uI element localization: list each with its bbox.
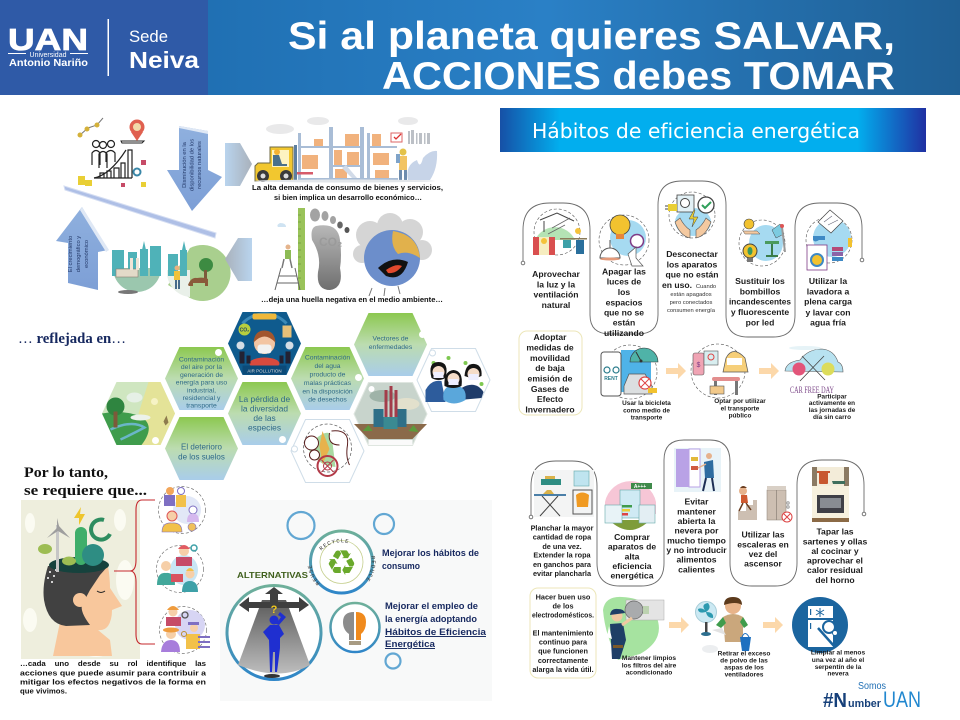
icon: bicycle rent xyxy=(601,345,658,399)
habit: tapar sartenes: aprovechar el xyxy=(807,556,863,566)
brand: somos number uan: Somos xyxy=(858,681,886,692)
title: Si al planeta quieres SALVAR, xyxy=(288,15,895,58)
habit: desconectar: en uso. xyxy=(662,280,692,290)
habit: bombillos: bombillos xyxy=(740,286,781,296)
box: electrodomésticos: que funcionen xyxy=(538,647,588,656)
illustration: carbon footprint xyxy=(275,208,432,296)
text: filtros: Mantener limpios xyxy=(622,655,676,662)
habit: tapar sartenes: del horno xyxy=(815,575,855,585)
brand: somos number uan: UAN xyxy=(883,687,921,712)
text: transporte: el transporte xyxy=(721,406,760,413)
hex: factory landscape xyxy=(354,382,427,446)
paragraph: cada uno: acciones que puede asumir para contribuir a xyxy=(20,668,207,678)
hex: contaminación agua: en la disposición xyxy=(302,388,353,395)
banner: hábitos de eficiencia xyxy=(500,108,926,152)
arrow text: El crecimiento xyxy=(68,236,74,272)
hex: contaminación agua: producto de xyxy=(310,372,346,378)
arrow: step 2 xyxy=(759,363,779,379)
icon: deforestation xyxy=(167,241,231,301)
habit: apagar luces: espacios xyxy=(606,297,643,307)
crossroads circle: ? xyxy=(271,604,278,616)
habit: planchar: Extender la ropa xyxy=(533,550,592,560)
label: alternativas: ALTERNATIVAS xyxy=(237,570,308,580)
box: movilidad: Gases de xyxy=(531,384,569,394)
caption: demanda xyxy=(252,183,443,202)
recycle badge: REDUCE xyxy=(366,556,376,582)
habit: nevera: mantener xyxy=(677,506,716,516)
habit: aparatos eficientes: alta xyxy=(625,551,640,561)
hex: air pollution image: CO₂ xyxy=(240,328,249,334)
habit: nevera: calientes xyxy=(678,564,715,574)
habit: aparatos eficientes: eficiencia xyxy=(612,561,652,571)
habit: apagar luces: Apagar las xyxy=(602,266,646,276)
habit: desconectar xyxy=(662,192,719,314)
habit: aparatos eficientes xyxy=(605,481,656,581)
text: bicicleta: transporte xyxy=(631,415,663,422)
illustration: warehouse xyxy=(255,117,437,182)
hex: contaminación aire: del aire por la xyxy=(181,364,222,371)
recycle badge: REUSE xyxy=(308,565,320,586)
habit: bombillos: Sustituir los xyxy=(735,276,785,286)
habit: tapar sartenes: calor residual xyxy=(807,565,863,575)
hex: contaminación agua: del agua xyxy=(314,363,341,370)
caption: demanda: La alta demanda de consumo de bienes y servicios, xyxy=(252,183,443,192)
text: transporte: Optar por utilizar xyxy=(714,398,766,405)
habit: desconectar: los aparatos xyxy=(667,259,718,269)
hex: contaminación aire: residencial y xyxy=(183,395,221,402)
logo UAN: Sede xyxy=(129,27,168,46)
icon: public transport: $ xyxy=(697,362,701,369)
logo UAN: Antonio Nariño xyxy=(9,58,88,69)
diagonal bar xyxy=(64,186,216,238)
icon: polluted city xyxy=(112,241,161,294)
habit: tapar sartenes: Tapar las xyxy=(816,526,854,536)
habit: aparatos eficientes: aparatos de xyxy=(608,542,656,552)
hex: vectores xyxy=(354,313,427,376)
habit: escaleras: vez del xyxy=(749,549,777,559)
habit: aprovechar luz: ventilación xyxy=(534,290,578,300)
logo UAN: Neiva xyxy=(129,47,199,73)
hex: contaminación aire: energía para uso xyxy=(176,380,227,386)
hex: pérdida diversidad: La pérdida de xyxy=(239,394,290,404)
chevron left xyxy=(225,238,252,281)
chevron right xyxy=(225,143,252,186)
heading: por lo tanto: Por lo tanto, xyxy=(24,465,108,481)
box: electrodomésticos: continuo para xyxy=(539,638,588,647)
habit: lavadora: y lavar con xyxy=(806,307,850,317)
box: electrodomésticos: de los xyxy=(552,601,574,610)
paragraph: cada uno: que vivimos. xyxy=(20,686,67,696)
habit: tapar sartenes: sartenes y ollas xyxy=(803,536,867,546)
recycle badge: ♻ xyxy=(326,544,357,584)
habit: nevera: alimentos xyxy=(676,555,717,565)
habit: apagar luces xyxy=(599,215,649,338)
habit: desconectar: consumen energía xyxy=(667,308,716,314)
title: ACCIONES debes TOMAR xyxy=(382,55,895,98)
habit: escaleras xyxy=(737,486,792,569)
habit: tapar sartenes: al cocinar y xyxy=(811,546,859,556)
hex: pérdida diversidad xyxy=(228,382,301,445)
header band xyxy=(0,0,960,98)
hex: suelos xyxy=(165,417,238,480)
bracket xyxy=(114,500,155,644)
habit: aprovechar luz: Aprovechar xyxy=(532,269,581,279)
icon: bicycle rent: RENT xyxy=(604,376,618,382)
habit: lavadora: Utilizar la xyxy=(809,276,847,286)
habit: nevera xyxy=(666,448,727,574)
hex: contaminación aire: Contaminación xyxy=(179,356,224,364)
box: electrodomésticos: alarga la vida útil. xyxy=(532,665,594,674)
habit: apagar luces: están xyxy=(613,318,635,328)
hex: landscape xyxy=(102,382,175,445)
paragraph: cada uno xyxy=(20,659,207,696)
box: movilidad: emisión de xyxy=(528,374,573,384)
box: electrodomésticos: electrodomésticos. xyxy=(532,611,594,620)
hex: contaminación aire xyxy=(165,347,238,410)
arrow: step 3 xyxy=(669,617,689,633)
box: movilidad: medidas de xyxy=(526,342,574,352)
illustration: carbon footprint: CO₂ xyxy=(319,235,342,249)
habit: planchar: de una vez. xyxy=(542,542,582,551)
habit: aparatos eficientes: A+++ xyxy=(634,484,646,490)
text: empleo de la energía: la energía adoptando xyxy=(385,614,477,625)
box: movilidad: Efecto xyxy=(537,394,563,404)
logo UAN xyxy=(8,19,199,76)
icon: public transport xyxy=(691,344,748,398)
habit: desconectar: Cuando xyxy=(696,284,716,290)
habit: planchar: en ganchos para xyxy=(533,560,592,569)
habit: aparatos eficientes: energética xyxy=(610,571,654,581)
logo UAN: Universidad xyxy=(30,52,67,59)
arrow: step 1 xyxy=(666,363,686,379)
habit: apagar luces: luces de xyxy=(607,277,641,287)
habit: nevera: Evitar xyxy=(685,497,709,507)
paragraph: cada uno: …cada uno desde su rol identifique las xyxy=(20,659,206,668)
habit: lavadora: lavadora a xyxy=(807,286,849,296)
text: ventiladores: Retirar el exceso xyxy=(718,651,770,658)
habit: lavadora: agua fría xyxy=(810,317,846,327)
habit: desconectar: pero conectados xyxy=(670,300,713,306)
hex: contaminación aire: transporte xyxy=(186,402,217,410)
text: bicicleta: como medio de xyxy=(623,407,670,414)
text: serpentín: una vez al año el xyxy=(812,657,864,664)
text: transporte: público xyxy=(729,413,751,420)
arrow text: demográfico y xyxy=(76,236,82,272)
text: reflejada en: … reflejada en… xyxy=(18,331,126,347)
hex: contaminación aire: industrial, xyxy=(187,387,216,394)
habit: bombillos: por led xyxy=(746,317,774,327)
icon: population growth xyxy=(78,118,146,187)
box: movilidad: movilidad xyxy=(530,353,570,363)
hex: vectores: enfermedades xyxy=(369,344,413,351)
arrow text: disponibilidad de los xyxy=(190,139,196,191)
hex: suelos: de los suelos xyxy=(178,452,225,462)
habit: nevera: nevera por xyxy=(675,526,719,536)
icon: car free day xyxy=(785,346,843,395)
box: electrodomésticos xyxy=(530,588,596,678)
habit: aprovechar luz: la luz y la xyxy=(537,279,575,289)
text: serpentín: serpentín de la xyxy=(815,664,862,671)
icon: role group 3 xyxy=(160,606,210,654)
arrow: demographic growth xyxy=(56,207,109,290)
habit: planchar: evitar plancharla xyxy=(533,569,592,578)
hex: endangered species xyxy=(291,420,364,482)
habit: desconectar: están apagados xyxy=(670,292,712,298)
habit: nevera: y no introducir xyxy=(666,545,727,555)
arrow: step 4 xyxy=(763,617,783,633)
serpentine outline: row 1 xyxy=(521,181,864,337)
habit: aprovechar luz xyxy=(532,209,587,310)
hex: contaminación aire: generación de xyxy=(180,372,223,379)
brand: somos number uan: umber xyxy=(848,698,882,710)
serpentine outline: row 2 xyxy=(529,440,866,586)
text: ventiladores: de polvo de las xyxy=(720,658,768,665)
brand: somos number uan xyxy=(823,681,921,712)
habit: escaleras: ascensor xyxy=(744,559,783,569)
icon: fan and worker xyxy=(696,597,751,653)
habit: planchar xyxy=(531,470,594,578)
hex: pérdida diversidad: especies xyxy=(248,422,281,432)
habit: lavadora: plena carga xyxy=(804,297,852,307)
bulb brain badge xyxy=(330,603,380,652)
text: empleo de la energía: Energética xyxy=(385,639,436,650)
text: día sin carro: día sin carro xyxy=(813,414,851,421)
text: día sin carro: las jornadas de xyxy=(809,407,856,414)
caption: demanda: si bien implica un desarrollo económico… xyxy=(274,193,422,202)
text: hábitos de consumo: consumo xyxy=(382,561,420,572)
habit: escaleras: escaleras en xyxy=(737,539,789,549)
icon: fridge maintenance xyxy=(792,597,848,653)
panel: alternativas xyxy=(226,510,487,681)
box: movilidad: de baja xyxy=(535,363,565,373)
illustration: green head xyxy=(21,500,140,659)
habit: apagar luces: que no se xyxy=(604,308,644,318)
icon: role group 2 xyxy=(156,545,204,592)
box: movilidad: Adoptar xyxy=(534,332,567,342)
hex: people with masks xyxy=(417,348,490,412)
habit: escaleras: Utilizar las xyxy=(742,530,785,540)
box: movilidad xyxy=(519,331,582,415)
habit: lavadora xyxy=(804,210,852,327)
habit: aprovechar luz: natural xyxy=(542,300,570,310)
logo UAN: UAN xyxy=(8,22,88,57)
habit: planchar: cantidad de ropa xyxy=(533,532,592,542)
heading: por lo tanto: se requiere que... xyxy=(24,483,147,499)
habit: nevera: abierta la xyxy=(678,516,716,526)
text: día sin carro: activamente en xyxy=(809,400,855,407)
recycle badge: RECYCLE xyxy=(319,538,348,550)
hex: suelos: El deterioro xyxy=(181,442,222,452)
text: hábitos de consumo: Mejorar los hábitos de xyxy=(382,548,479,559)
hex: contaminación agua: malas prácticas xyxy=(304,380,352,387)
box: electrodomésticos: Hacer buen uso xyxy=(536,592,591,601)
icon: car free day: CAR FREE DAY xyxy=(790,385,834,395)
caption: huella: …deja una huella negativa en el medio ambiente… xyxy=(261,295,443,304)
text: serpentín: nevera xyxy=(827,671,849,678)
text: ventiladores: aspas de los xyxy=(724,664,764,671)
habit: bombillos xyxy=(729,219,791,327)
habit: apagar luces: utilizando xyxy=(604,328,644,338)
habit: apagar luces: los xyxy=(618,287,630,297)
habit: bombillos: y fluorescente xyxy=(731,307,789,317)
icon: role group 1 xyxy=(158,486,206,534)
text: día sin carro: Participar xyxy=(817,394,847,400)
habit: tapar sartenes xyxy=(803,467,867,585)
hex: contaminación agua: Contaminación xyxy=(305,354,350,362)
banner: hábitos de eficiencia: Hábitos de eficiencia energética xyxy=(532,119,860,143)
arrow text: económico xyxy=(84,240,90,268)
text: filtros: acondicionado xyxy=(626,669,672,676)
decorative rings xyxy=(288,512,400,668)
hex: vectores: Vectores de xyxy=(373,336,409,342)
text: empleo de la energía: Hábitos de Eficiencia xyxy=(385,627,487,638)
hex: pérdida diversidad: la diversidad xyxy=(241,404,288,414)
text: ventiladores: ventiladores xyxy=(725,671,764,678)
arrow text: recursos naturales xyxy=(197,141,203,189)
hex: air pollution image: AIR POLLUTION xyxy=(247,368,282,374)
habit: nevera: mucho tiempo xyxy=(667,535,726,545)
habit: aparatos eficientes: Comprar xyxy=(614,532,651,542)
crossroads circle xyxy=(227,586,321,680)
icon: technician xyxy=(603,597,664,660)
box: electrodomésticos: El mantenimiento xyxy=(533,629,594,638)
habit: desconectar: que no están xyxy=(665,270,719,280)
hex: contaminación agua xyxy=(291,347,364,410)
habit: desconectar: Desconectar xyxy=(666,249,718,259)
arrow: decreasing resources xyxy=(167,126,222,211)
hex: air pollution image xyxy=(228,312,301,375)
habit: bombillos: incandescentes xyxy=(729,297,791,307)
habit: planchar: Planchar la mayor xyxy=(531,524,594,532)
hex: contaminación agua: de desechos xyxy=(308,396,347,404)
brand: somos number uan: #N xyxy=(823,690,847,712)
hex: pérdida diversidad: de las xyxy=(253,413,276,423)
text: bicicleta: Usar la bicicleta xyxy=(622,400,671,407)
box: movilidad: Invernadero xyxy=(525,404,575,414)
text: filtros: los filtros del aire xyxy=(622,662,677,669)
text: empleo de la energía: Mejorar el empleo de xyxy=(385,601,478,612)
text: serpentín: Limpiar al menos xyxy=(811,650,865,657)
box: electrodomésticos: correctamente xyxy=(538,656,588,665)
arrow text: Disminución en la xyxy=(182,141,188,188)
paragraph: cada uno: mitigar los efectos negativos de la forma en xyxy=(20,678,206,686)
recycle badge xyxy=(308,530,376,594)
